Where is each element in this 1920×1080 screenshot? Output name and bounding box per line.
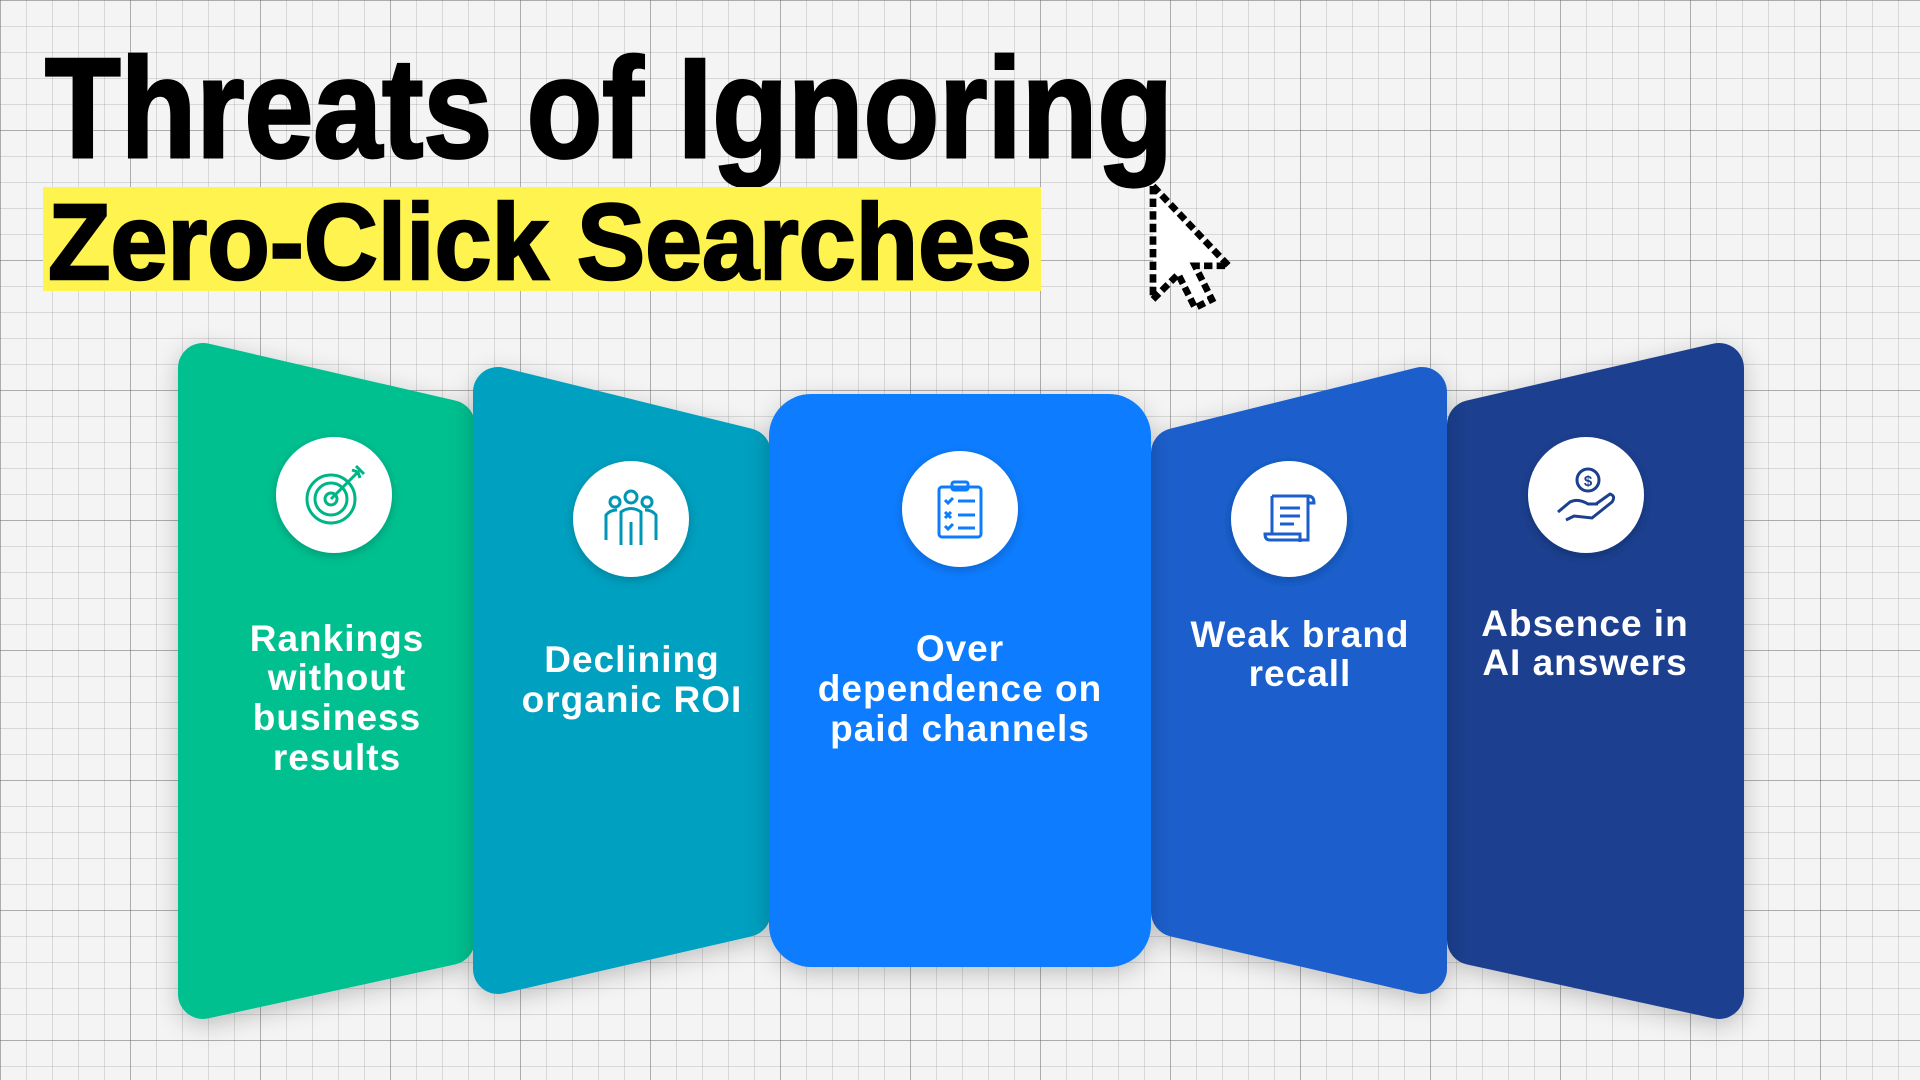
icon: scroll [1231,461,1347,577]
icon: mouse cursor [1153,186,1229,308]
icon: clipboard [902,451,1018,567]
panel: declining organic ROI [498,392,746,969]
panel: rankings without business results [203,368,450,994]
text: rankings: results [273,737,401,778]
subtitle highlight: Zero-Click Searches [48,181,1032,302]
text: declining: organic ROI [522,679,742,720]
panel: absence in AI answers [1472,368,1719,994]
icon: hand with dollar [1528,437,1644,553]
icon: hand with dollar: $ [1584,473,1593,490]
text: absence: AI answers [1482,642,1688,683]
text: weak brand: Weak brand [1190,614,1410,655]
text: over dependence: dependence on [818,668,1102,709]
panel: weak brand recall [1176,392,1422,969]
icon: target [276,437,392,553]
text: declining: Declining [544,639,720,680]
text: rankings: without [267,657,406,698]
panel: over dependence on paid channels [769,394,1151,967]
title: Threats of Ignoring [45,29,1173,188]
text: over dependence: paid channels [830,708,1090,749]
text: rankings: business [253,697,421,738]
text: over dependence: Over [916,628,1004,669]
text: absence: Absence in [1481,603,1689,644]
text: weak brand: recall [1249,653,1351,694]
title [43,29,1173,302]
text: rankings: Rankings [250,618,424,659]
icon: team [573,461,689,577]
